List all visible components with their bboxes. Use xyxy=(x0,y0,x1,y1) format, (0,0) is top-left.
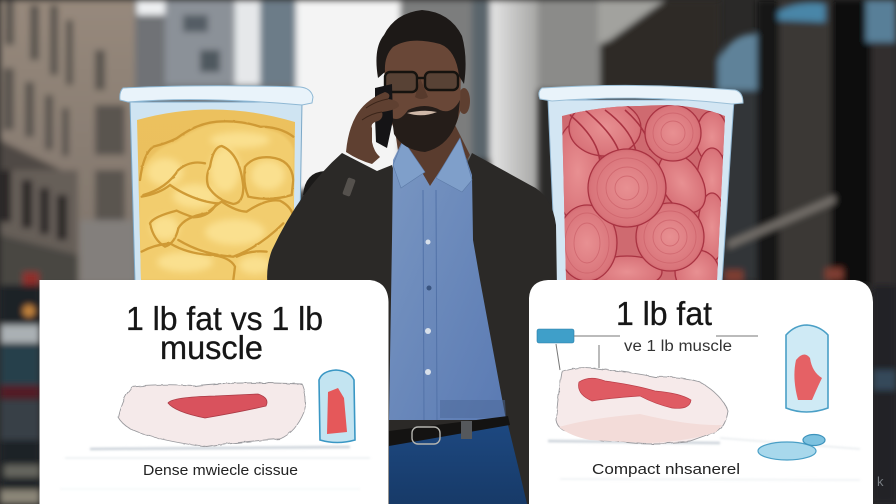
jar: fat xyxy=(120,86,313,285)
shirt placket and buttons xyxy=(423,190,506,420)
sleeve button detail xyxy=(342,177,356,197)
shirt collar xyxy=(393,138,472,192)
jar body xyxy=(548,100,734,282)
head xyxy=(376,10,470,152)
card background xyxy=(40,280,388,504)
icon: muscle in fat slab xyxy=(118,383,306,447)
light lumps mass xyxy=(139,122,294,280)
finger gaps xyxy=(362,99,388,120)
phone xyxy=(375,84,393,148)
icon: syringe pointer xyxy=(537,329,758,370)
belt xyxy=(389,416,510,446)
jeans xyxy=(389,425,527,504)
panel: right card xyxy=(529,280,873,504)
ground shadow xyxy=(548,438,860,480)
title: 1 lb fat xyxy=(616,295,712,332)
jar rim xyxy=(539,85,743,104)
glasses xyxy=(385,72,458,92)
ear xyxy=(458,88,470,114)
mouth xyxy=(407,111,437,115)
nose xyxy=(415,78,428,99)
muscle contents xyxy=(562,105,725,280)
person on phone xyxy=(267,10,557,504)
watermark: k xyxy=(877,474,884,489)
fat contents xyxy=(137,110,295,280)
far shoulder xyxy=(303,171,345,200)
icon: muscle in fat slab xyxy=(556,368,728,444)
hand xyxy=(346,92,399,164)
jacket xyxy=(267,153,557,504)
jar rim xyxy=(120,86,313,105)
jar: muscle xyxy=(539,85,743,294)
hair xyxy=(376,10,466,84)
caption: Compact nhsanerel xyxy=(592,461,740,478)
beard xyxy=(392,100,460,152)
title second line: muscle xyxy=(160,329,263,366)
icon: discs xyxy=(758,434,825,460)
card background xyxy=(529,280,873,504)
shirt xyxy=(389,140,506,420)
face xyxy=(383,36,461,150)
lump highlights xyxy=(147,132,285,274)
ground shadow xyxy=(60,447,370,489)
neck xyxy=(395,125,470,205)
panel: left card xyxy=(40,280,388,504)
jar body xyxy=(130,102,302,282)
icon: sample jar xyxy=(786,325,828,412)
title: 1 lb fat vs 1 lb xyxy=(126,300,323,337)
subtitle: ve 1 lb muscle xyxy=(624,338,732,355)
caption: Dense mwiecle cissue xyxy=(143,463,298,479)
icon: sample jar xyxy=(319,370,355,442)
